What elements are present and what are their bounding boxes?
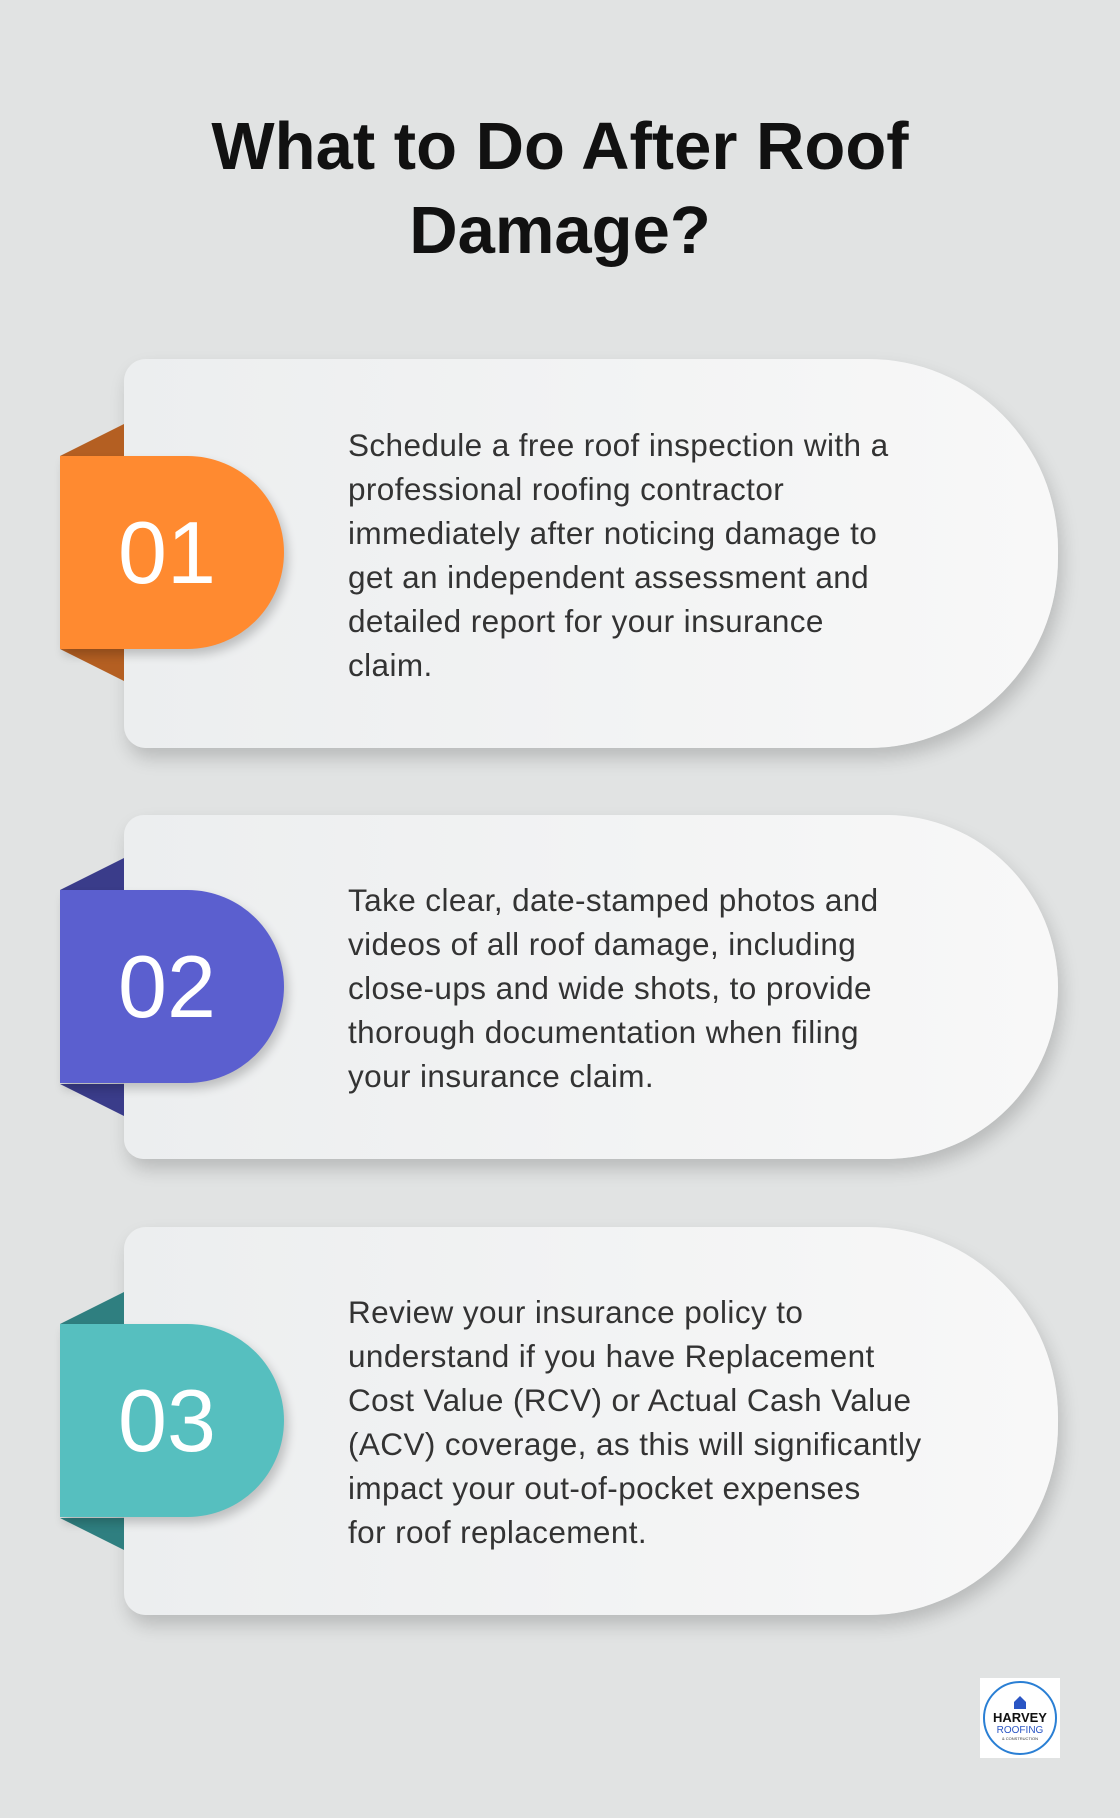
text: step 3: impact your out-of-pocket expenses bbox=[348, 1470, 861, 1506]
number badge 02 bbox=[60, 890, 284, 1083]
text: step 2: thorough documentation when filing bbox=[348, 1014, 859, 1050]
fold: step 1 bbox=[60, 424, 124, 456]
text: step 2: your insurance claim. bbox=[348, 1058, 654, 1094]
text: step 2: close-ups and wide shots, to provide bbox=[348, 970, 872, 1006]
number badge 01 bbox=[60, 456, 284, 649]
text: step 3: Cost Value (RCV) or Actual Cash Value bbox=[348, 1382, 911, 1418]
text: step 3: understand if you have Replacement bbox=[348, 1338, 875, 1374]
logo bbox=[980, 1678, 1060, 1758]
text: step 3: Review your insurance policy to bbox=[348, 1294, 803, 1330]
text: step 1: professional roofing contractor bbox=[348, 471, 784, 507]
logo: ROOFING bbox=[997, 1725, 1044, 1736]
text: step 1: detailed report for your insurance bbox=[348, 603, 824, 639]
panel: step 1 bbox=[124, 359, 1058, 748]
fold: step 3 bbox=[60, 1292, 124, 1324]
text: step 1: get an independent assessment and bbox=[348, 559, 869, 595]
text: step 1: immediately after noticing damage to bbox=[348, 515, 877, 551]
text: step 2 bbox=[348, 882, 879, 1094]
number badge 01: 01 bbox=[118, 503, 216, 602]
text: step 2: videos of all roof damage, including bbox=[348, 926, 856, 962]
text: step 3: for roof replacement. bbox=[348, 1514, 647, 1550]
number badge 02: 02 bbox=[118, 937, 216, 1036]
number badge 03: 03 bbox=[118, 1371, 216, 1470]
panel: step 2 bbox=[124, 815, 1058, 1159]
text: step 2: Take clear, date-stamped photos and bbox=[348, 882, 879, 918]
logo: HARVEY bbox=[993, 1710, 1047, 1725]
text: step 1: claim. bbox=[348, 647, 433, 683]
number badge 03 bbox=[60, 1324, 284, 1517]
fold: step 2 bbox=[60, 858, 124, 890]
text: step 3: (ACV) coverage, as this will significantly bbox=[348, 1426, 922, 1462]
text: step 1: Schedule a free roof inspection with a bbox=[348, 427, 889, 463]
text: step 3 bbox=[348, 1294, 922, 1550]
title bbox=[211, 109, 909, 268]
title: Damage? bbox=[409, 193, 711, 268]
logo: & CONSTRUCTION bbox=[1002, 1736, 1038, 1741]
title: What to Do After Roof bbox=[211, 109, 909, 184]
text: step 1 bbox=[348, 427, 889, 683]
panel: step 3 bbox=[124, 1227, 1058, 1615]
